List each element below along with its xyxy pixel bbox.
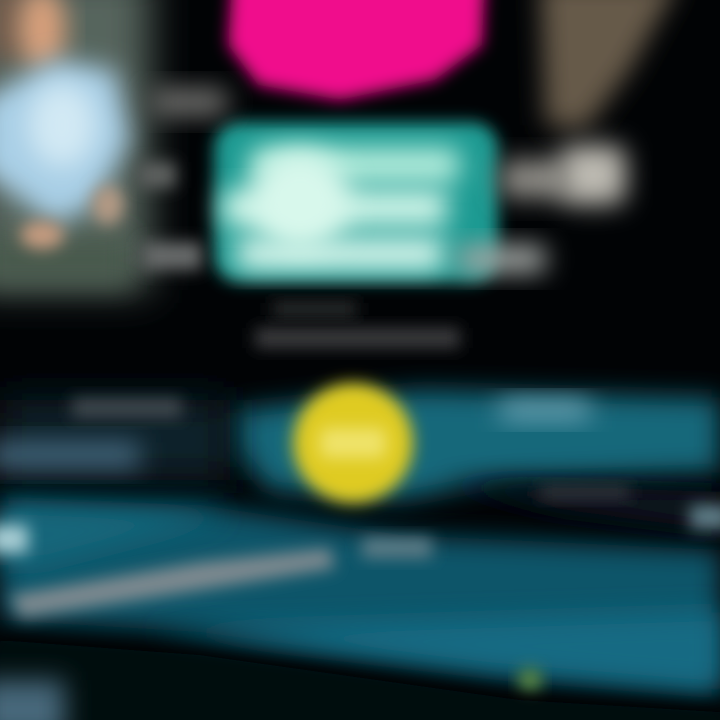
panel: top photo strip <box>0 0 680 290</box>
badge text <box>320 428 386 458</box>
text block: short label <box>362 538 432 558</box>
panel: bottom dark strip <box>0 640 720 720</box>
text block: diagonal label <box>10 548 335 618</box>
heading text band 2 <box>222 190 448 226</box>
text block: left band label <box>0 442 140 468</box>
heading: teal title panel <box>214 122 498 282</box>
text block: left band label top <box>72 398 182 418</box>
icon: yellow circle badge <box>293 383 413 503</box>
panel: teal band <box>0 390 720 500</box>
text block: caption below heading <box>255 302 460 348</box>
label: grey lower-right tag <box>458 245 546 273</box>
label: grey upper-left tag <box>150 88 228 116</box>
text block: right edge mark <box>690 505 720 529</box>
photo: person on the left <box>0 0 150 290</box>
label: grey left side marks <box>138 162 202 270</box>
label: grey right tag <box>500 145 626 205</box>
panel: lower teal section <box>0 482 720 690</box>
heading text band 1 <box>250 148 460 182</box>
photo: tan subject on the right <box>540 0 680 130</box>
text block: left edge mark <box>0 525 28 553</box>
text block: right band label <box>500 400 590 420</box>
heading text highlight <box>250 150 350 250</box>
icon: small green dot <box>518 668 542 692</box>
photo: magenta subject <box>228 0 485 100</box>
heading text band 3 <box>235 238 445 270</box>
text block: dark band label <box>540 485 630 499</box>
